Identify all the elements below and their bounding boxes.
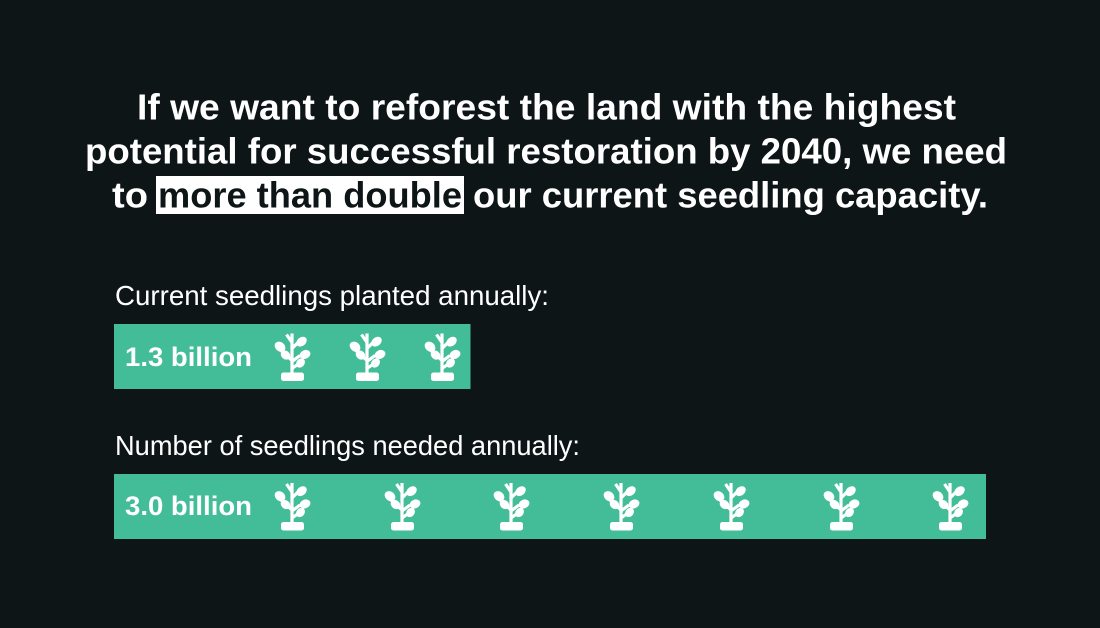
bar: current seedlings 1.3 billion: 1.3 billion	[125, 342, 252, 372]
bar: seedlings needed 3.0 billion	[114, 474, 986, 539]
label: seedlings needed: Number of seedlings needed annually:	[115, 430, 580, 461]
bar: seedlings needed 3.0 billion: 3.0 billion	[125, 491, 252, 521]
title: to	[112, 174, 148, 216]
title: potential for successful restoration by 2040, we need	[85, 130, 1007, 172]
label: current seedlings: Current seedlings planted annually:	[115, 280, 549, 311]
title	[85, 86, 1007, 216]
icons: seedlings row 1	[273, 334, 462, 381]
icons: seedlings row 2	[273, 483, 970, 530]
bar: current seedlings 1.3 billion	[114, 324, 470, 389]
title: If we want to reforest the land with the highest	[137, 86, 956, 128]
highlight: more than double: more than double	[158, 174, 462, 216]
title: our current seedling capacity.	[473, 174, 988, 216]
